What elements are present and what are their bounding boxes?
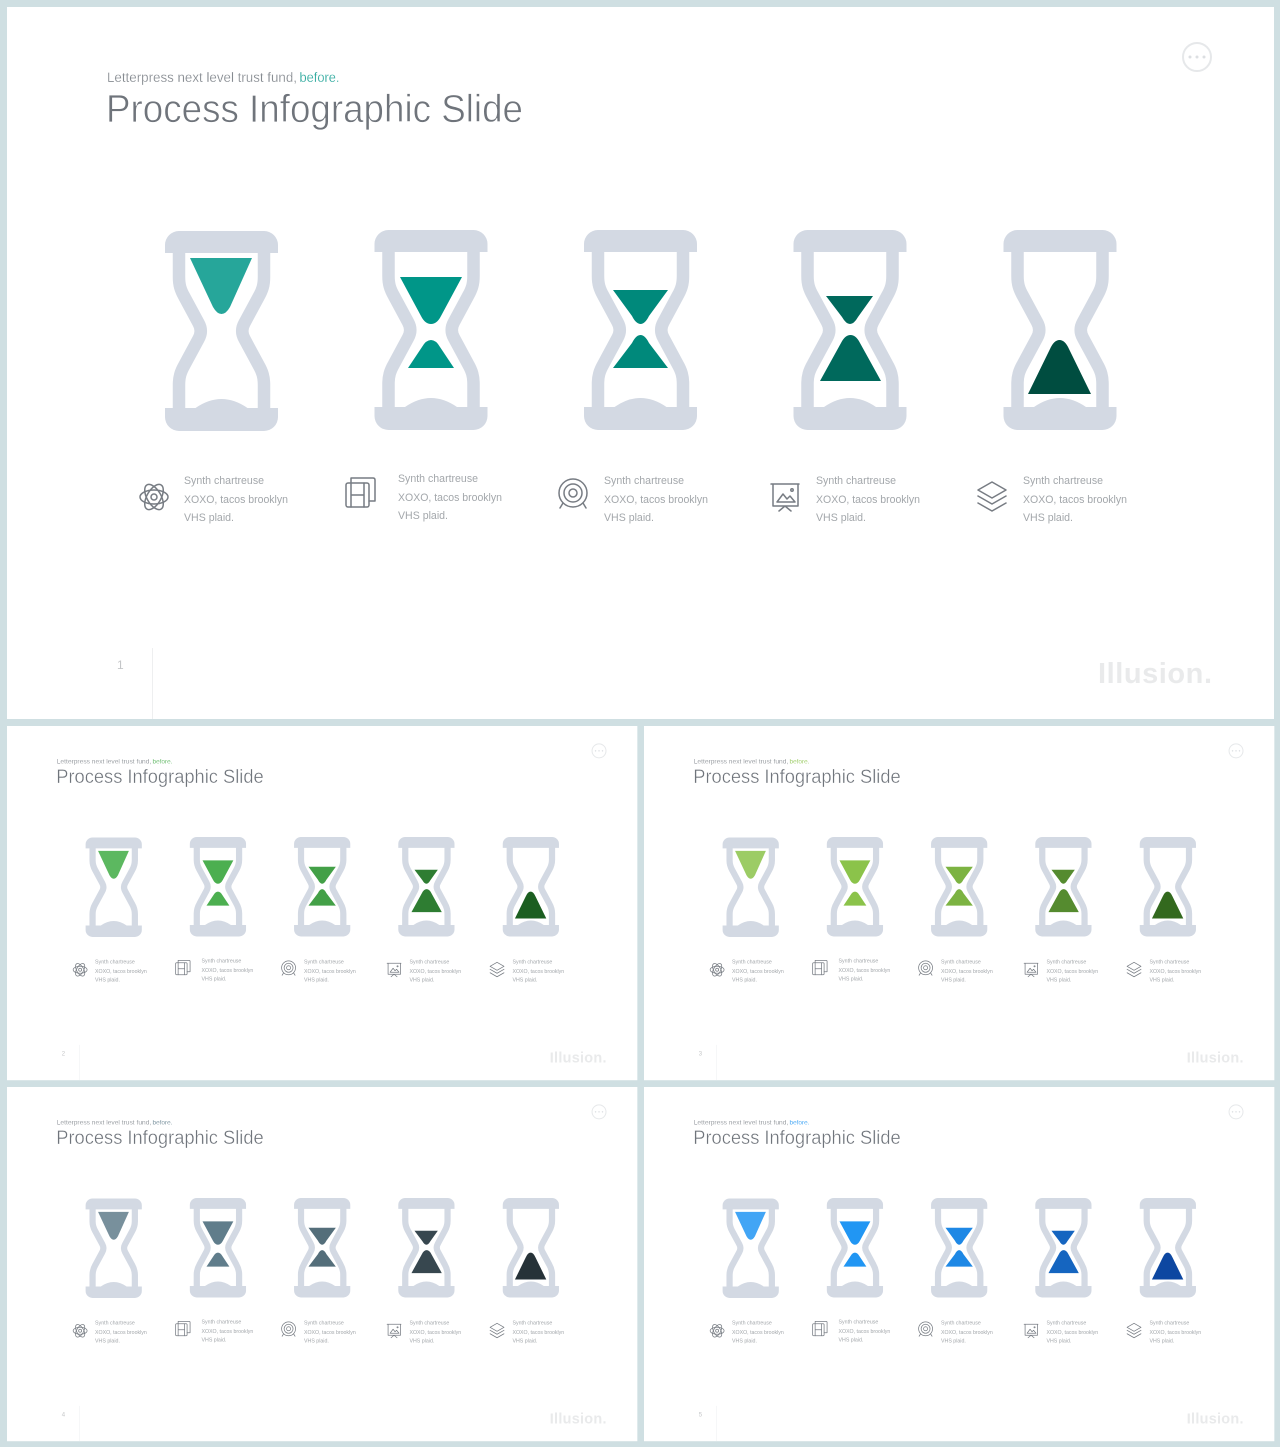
text: step 3 <box>304 1320 356 1345</box>
hourglass 2 <box>190 837 246 936</box>
text: step 2: XOXO, tacos brooklyn <box>202 968 253 974</box>
text: step 2 <box>839 958 890 983</box>
subtitle: before. <box>153 758 173 765</box>
hourglass 5 <box>1140 1198 1196 1297</box>
text: step 4: Synth chartreuse <box>409 1320 449 1326</box>
hourglass 3 <box>931 837 987 936</box>
icon: layers <box>1127 1323 1141 1338</box>
icon: film <box>346 478 375 507</box>
icon: film <box>176 960 190 975</box>
text: step 4: VHS plaid. <box>409 978 435 984</box>
text: step 5 <box>512 1320 564 1345</box>
text: step 3: VHS plaid. <box>941 978 966 984</box>
text: step 4 <box>816 475 920 524</box>
text: step 3 <box>941 959 993 984</box>
text: step 1: Synth chartreuse <box>95 959 135 965</box>
icon: presentation board <box>1024 1324 1038 1338</box>
text: step 2 <box>839 1319 890 1344</box>
icon: layers <box>490 1323 504 1338</box>
hourglass 4 <box>794 230 906 430</box>
page number: 5 <box>699 1412 703 1418</box>
text: step 4: Synth chartreuse <box>409 959 449 965</box>
text: step 2 <box>202 958 253 983</box>
page number: 4 <box>62 1412 66 1418</box>
text: step 1: VHS plaid. <box>184 512 234 524</box>
page number <box>699 1406 717 1441</box>
icon: layers <box>490 962 504 977</box>
text: step 1 <box>95 1320 147 1345</box>
menu icon <box>592 1105 606 1119</box>
hourglass 2 <box>827 1198 883 1297</box>
brand: Illusion. <box>1098 658 1212 690</box>
icon: presentation board <box>1024 963 1038 977</box>
text: step 4 <box>409 959 461 984</box>
page number: 2 <box>62 1051 66 1057</box>
text: step 4: XOXO, tacos brooklyn <box>409 969 461 975</box>
text: step 3 <box>941 1320 993 1345</box>
icon: layers <box>978 482 1006 511</box>
hourglass 1 <box>165 231 278 431</box>
hourglass 2 <box>374 230 488 430</box>
text: step 5: Synth chartreuse <box>1149 1320 1189 1326</box>
icon: presentation board <box>771 484 799 511</box>
text: step 2: VHS plaid. <box>398 510 448 522</box>
icon: target <box>559 479 587 508</box>
brand: Illusion. <box>1187 1050 1243 1066</box>
text: step 1: Synth chartreuse <box>732 1320 772 1326</box>
hourglass 3 <box>584 230 697 430</box>
icon: atom <box>710 962 724 978</box>
icon: atom <box>710 1323 724 1339</box>
subtitle: Letterpress next level trust fund, <box>694 1119 788 1126</box>
title: Process Infographic Slide <box>693 1127 901 1149</box>
page number: 3 <box>699 1051 703 1057</box>
text: step 2: VHS plaid. <box>202 977 227 983</box>
text: step 2: VHS plaid. <box>839 1338 864 1344</box>
hourglass 1 <box>86 1198 142 1298</box>
text: step 2: XOXO, tacos brooklyn <box>202 1329 253 1335</box>
menu icon <box>1229 744 1243 758</box>
hourglass 4 <box>1035 837 1092 936</box>
hourglass 4 <box>1035 1198 1092 1297</box>
text: step 1: XOXO, tacos brooklyn <box>95 1330 147 1336</box>
text: step 4 <box>1046 959 1098 984</box>
text: step 1: Synth chartreuse <box>732 959 772 965</box>
text: step 1: VHS plaid. <box>732 1339 757 1345</box>
hourglass 5 <box>503 837 559 936</box>
text: step 5 <box>1149 959 1201 984</box>
text: step 3: VHS plaid. <box>304 978 329 984</box>
text: step 3: Synth chartreuse <box>304 1320 344 1326</box>
text: step 5: VHS plaid. <box>1149 978 1175 984</box>
text: step 3: Synth chartreuse <box>304 959 344 965</box>
hourglass 2 <box>190 1198 246 1297</box>
text: step 5 <box>1149 1320 1201 1345</box>
hourglass 5 <box>1140 837 1196 936</box>
text: step 1: Synth chartreuse <box>95 1320 135 1326</box>
text: step 2 <box>202 1319 253 1344</box>
text: step 5: XOXO, tacos brooklyn <box>1149 969 1201 975</box>
icon: film <box>813 1321 827 1336</box>
text: step 4: XOXO, tacos brooklyn <box>1046 969 1098 975</box>
text: step 2: Synth chartreuse <box>398 473 478 485</box>
hourglass 5 <box>503 1198 559 1297</box>
text: step 5: Synth chartreuse <box>1023 475 1103 487</box>
panel: slide 4 slate <box>7 1087 637 1441</box>
hourglass 1 <box>723 1198 779 1298</box>
text: step 1 <box>184 475 288 524</box>
text: step 3: XOXO, tacos brooklyn <box>304 1330 356 1336</box>
page number <box>62 1406 80 1441</box>
menu icon <box>592 744 606 758</box>
text: step 5: XOXO, tacos brooklyn <box>1149 1330 1201 1336</box>
text: step 2: XOXO, tacos brooklyn <box>398 492 502 504</box>
text: step 1: XOXO, tacos brooklyn <box>732 1330 784 1336</box>
icon: presentation board <box>387 963 401 977</box>
text: step 1 <box>732 959 784 984</box>
text: step 3: XOXO, tacos brooklyn <box>604 494 708 506</box>
icon: atom <box>73 962 87 978</box>
hourglass 1 <box>86 837 142 937</box>
text: step 5: Synth chartreuse <box>1149 959 1189 965</box>
icon: layers <box>1127 962 1141 977</box>
text: step 2: VHS plaid. <box>839 977 864 983</box>
text: step 1: VHS plaid. <box>732 978 757 984</box>
panel: slide 1 teal <box>7 7 1274 719</box>
subtitle: Letterpress next level trust fund, <box>694 758 788 765</box>
text: step 5: Synth chartreuse <box>512 1320 552 1326</box>
text: step 2: Synth chartreuse <box>839 958 878 964</box>
text: step 3: VHS plaid. <box>941 1339 966 1345</box>
text: step 5: VHS plaid. <box>512 978 538 984</box>
text: step 4: VHS plaid. <box>1046 1339 1072 1345</box>
text: step 4 <box>409 1320 461 1345</box>
menu icon <box>1229 1105 1243 1119</box>
panel: slide 2 green <box>7 726 637 1080</box>
hourglass 4 <box>398 837 455 936</box>
menu icon <box>1183 43 1211 71</box>
page number <box>117 648 153 719</box>
icon: target <box>282 1322 296 1336</box>
subtitle: before. <box>300 70 340 85</box>
text: step 1: VHS plaid. <box>95 1339 120 1345</box>
text: step 1 <box>732 1320 784 1345</box>
hourglass 3 <box>931 1198 987 1297</box>
text: step 2: Synth chartreuse <box>202 1319 241 1325</box>
text: step 2 <box>398 473 502 522</box>
text: step 2: VHS plaid. <box>202 1338 227 1344</box>
subtitle: Letterpress next level trust fund, <box>107 70 297 85</box>
icon: film <box>176 1321 190 1336</box>
brand: Illusion. <box>1187 1411 1243 1427</box>
text: step 3: XOXO, tacos brooklyn <box>941 1330 993 1336</box>
hourglass 5 <box>1004 230 1116 430</box>
panel: slide 3 light green <box>644 726 1274 1080</box>
text: step 4: Synth chartreuse <box>816 475 896 487</box>
text: step 5 <box>512 959 564 984</box>
panel: slide 5 blue <box>644 1087 1274 1441</box>
text: step 5: VHS plaid. <box>1023 512 1073 524</box>
text: step 1: XOXO, tacos brooklyn <box>732 969 784 975</box>
text: step 4: VHS plaid. <box>1046 978 1072 984</box>
text: step 1: XOXO, tacos brooklyn <box>95 969 147 975</box>
text: step 3: VHS plaid. <box>604 512 654 524</box>
page number: 1 <box>117 658 124 672</box>
text: step 3: Synth chartreuse <box>941 959 981 965</box>
subtitle: before. <box>153 1119 173 1126</box>
brand: Illusion. <box>550 1411 606 1427</box>
hourglass 1 <box>723 837 779 937</box>
text: step 4: VHS plaid. <box>816 512 866 524</box>
brand: Illusion. <box>550 1050 606 1066</box>
text: step 4: Synth chartreuse <box>1046 1320 1086 1326</box>
text: step 4: XOXO, tacos brooklyn <box>1046 1330 1098 1336</box>
subtitle: before. <box>790 1119 810 1126</box>
icon: atom <box>140 481 168 513</box>
text: step 1: VHS plaid. <box>95 978 120 984</box>
hourglass 2 <box>827 837 883 936</box>
text: step 1: Synth chartreuse <box>184 475 264 487</box>
title: Process Infographic Slide <box>56 766 264 788</box>
text: step 3 <box>304 959 356 984</box>
text: step 4 <box>1046 1320 1098 1345</box>
text: step 5 <box>1023 475 1127 524</box>
text: step 1 <box>95 959 147 984</box>
text: step 1: XOXO, tacos brooklyn <box>184 494 288 506</box>
icon: target <box>919 961 933 975</box>
text: step 5: XOXO, tacos brooklyn <box>512 969 564 975</box>
icon: target <box>919 1322 933 1336</box>
text: step 5: Synth chartreuse <box>512 959 552 965</box>
icon: film <box>813 960 827 975</box>
text: step 3 <box>604 475 708 524</box>
title: Process Infographic Slide <box>693 766 901 788</box>
page number <box>699 1045 717 1080</box>
text: step 5: XOXO, tacos brooklyn <box>512 1330 564 1336</box>
text: step 2: Synth chartreuse <box>839 1319 878 1325</box>
hourglass 4 <box>398 1198 455 1297</box>
icon: target <box>282 961 296 975</box>
text: step 3: Synth chartreuse <box>941 1320 981 1326</box>
text: step 4: XOXO, tacos brooklyn <box>409 1330 461 1336</box>
text: step 5: VHS plaid. <box>1149 1339 1175 1345</box>
text: step 4: VHS plaid. <box>409 1339 435 1345</box>
text: step 2: Synth chartreuse <box>202 958 241 964</box>
subtitle: Letterpress next level trust fund, <box>57 758 151 765</box>
text: step 5: VHS plaid. <box>512 1339 538 1345</box>
text: step 3: VHS plaid. <box>304 1339 329 1345</box>
subtitle: Letterpress next level trust fund, <box>57 1119 151 1126</box>
hourglass 3 <box>294 837 350 936</box>
icon: presentation board <box>387 1324 401 1338</box>
text: step 3: XOXO, tacos brooklyn <box>941 969 993 975</box>
title: Process Infographic Slide <box>56 1127 264 1149</box>
subtitle: before. <box>790 758 810 765</box>
text: step 3: XOXO, tacos brooklyn <box>304 969 356 975</box>
text: step 2: XOXO, tacos brooklyn <box>839 1329 890 1335</box>
page number <box>62 1045 80 1080</box>
text: step 2: XOXO, tacos brooklyn <box>839 968 890 974</box>
title: Process Infographic Slide <box>106 88 523 131</box>
text: step 3: Synth chartreuse <box>604 475 684 487</box>
text: step 4: Synth chartreuse <box>1046 959 1086 965</box>
icon: atom <box>73 1323 87 1339</box>
text: step 4: XOXO, tacos brooklyn <box>816 494 920 506</box>
text: step 5: XOXO, tacos brooklyn <box>1023 494 1127 506</box>
hourglass 3 <box>294 1198 350 1297</box>
